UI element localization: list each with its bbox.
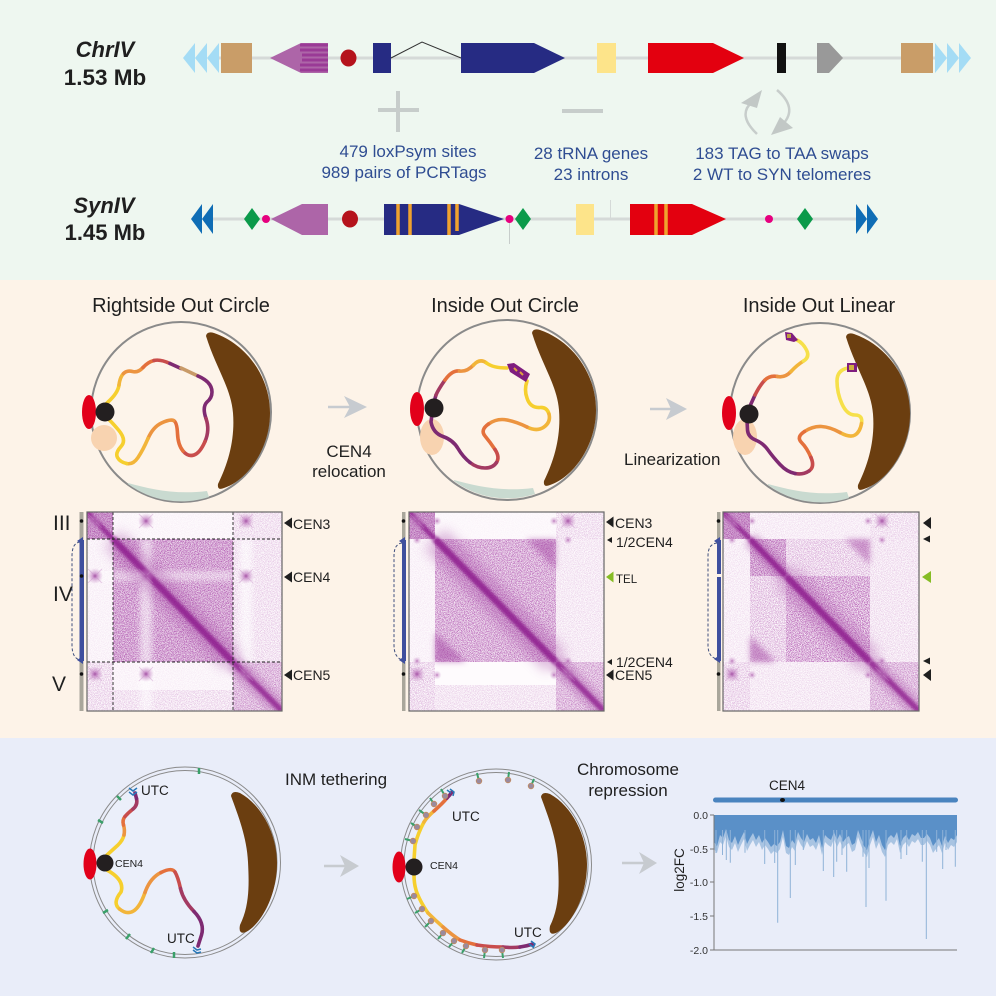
label: CEN4 relocation: relocation xyxy=(312,462,386,481)
gene track: SynIV xyxy=(191,200,878,244)
chromosome loop: inside out xyxy=(431,361,549,468)
y-axis label: log2FC xyxy=(672,848,687,892)
markers: CEN3, 1/2CEN4, TEL, CEN5: TEL xyxy=(616,574,638,586)
text: additions: 989 pairs of PCRTags xyxy=(321,163,487,182)
label: INM tethering: INM tethering xyxy=(285,770,387,789)
label: Chromosome repression: repression xyxy=(588,781,668,800)
markers: CEN3, 1/2CEN4, TEL, CEN5: 1/2CEN4 xyxy=(616,534,673,550)
icon: swap arrows xyxy=(741,90,793,135)
tick labels: -2.0 xyxy=(690,945,708,957)
label: Chromosome repression xyxy=(577,760,679,800)
markers: linear map arrowheads xyxy=(922,517,931,681)
labels: CEN4 xyxy=(115,858,143,870)
chromosome bar: inside out circle xyxy=(394,512,406,711)
gene track: ChrIV xyxy=(183,42,971,73)
text: additions xyxy=(321,142,487,182)
text: deletions xyxy=(534,144,648,184)
label: SynIV 1.45 Mb xyxy=(65,193,145,245)
panel: circularization and Hi-C (middle) xyxy=(0,280,996,738)
chromosome bar: inside out linear xyxy=(708,512,721,711)
panel: chromosome design (top) xyxy=(0,0,996,280)
telomere markers xyxy=(785,332,857,372)
markers: CEN3, 1/2CEN4, TEL, CEN5: CEN3 xyxy=(615,515,653,531)
icon: minus xyxy=(562,109,603,113)
tick labels: -1.0 xyxy=(690,877,708,889)
chromosome labels III IV V xyxy=(52,512,73,696)
markers: CEN3 CEN4 CEN5: CEN4 xyxy=(293,569,331,585)
INM anchors xyxy=(405,772,534,958)
text: swaps: 183 TAG to TAA swaps xyxy=(695,144,869,163)
label: SynIV 1.45 Mb: 1.45 Mb xyxy=(65,220,145,245)
arrow xyxy=(622,852,657,874)
nuclear pores xyxy=(98,768,199,958)
label: Linearization: Linearization xyxy=(624,450,720,469)
markers: CEN3 CEN4 CEN5 xyxy=(284,516,331,683)
nucleus: inside out linear xyxy=(722,323,910,503)
nucleus: untethered xyxy=(84,767,280,958)
arrow xyxy=(650,398,687,420)
text: swaps xyxy=(693,144,871,184)
heading: Rightside Out Circle: Rightside Out Circle xyxy=(92,295,270,317)
chromosome: tethered xyxy=(414,792,533,948)
panel: INM tethering (bottom) xyxy=(0,738,996,996)
labels: UTC xyxy=(167,931,195,946)
chromosome: inside out linear xyxy=(747,340,862,474)
label: Chromosome repression: Chromosome xyxy=(577,760,679,779)
Hi-C map: inside out linear xyxy=(723,512,919,711)
tick labels: -1.5 xyxy=(690,911,708,923)
bars xyxy=(714,815,957,939)
labels xyxy=(430,809,542,940)
axes xyxy=(710,815,957,950)
nucleus: tethered xyxy=(392,769,592,960)
text: deletions: 28 tRNA genes xyxy=(534,144,648,163)
label: CEN4 relocation xyxy=(312,442,386,481)
nucleus: inside out circle xyxy=(410,320,597,500)
Hi-C map: rightside out circle xyxy=(87,512,282,711)
text: additions: 479 loxPsym sites xyxy=(340,142,476,161)
chromosome labels III IV V: IV xyxy=(53,583,73,606)
tick labels: 0.0 xyxy=(693,810,708,822)
chromosome ideogram with CEN4: CEN4 xyxy=(769,778,805,793)
arrow xyxy=(328,396,367,418)
Hi-C map: inside out circle xyxy=(409,512,604,711)
chromosome labels III IV V: III xyxy=(53,512,71,535)
labels: UTC xyxy=(141,783,169,798)
icon: plus xyxy=(378,91,419,132)
heading: Inside Out Circle: Inside Out Circle xyxy=(431,295,579,317)
label: ChrIV 1.53 Mb: ChrIV xyxy=(76,37,137,62)
markers: CEN3, 1/2CEN4, TEL, CEN5: 1/2CEN4 xyxy=(616,654,673,670)
tick labels: -0.5 xyxy=(690,844,708,856)
heading: Inside Out Linear: Inside Out Linear xyxy=(743,295,895,317)
label: CEN4 relocation: CEN4 xyxy=(326,442,372,461)
labels: UTC xyxy=(452,809,480,824)
labels: CEN4 xyxy=(430,860,458,872)
nucleus: rightside out circle xyxy=(82,322,271,502)
chromosome: untethered xyxy=(107,793,202,946)
label: SynIV 1.45 Mb: SynIV xyxy=(73,193,137,218)
labels xyxy=(115,783,195,946)
tick labels xyxy=(690,810,708,957)
markers: CEN3, 1/2CEN4, TEL, CEN5: CEN5 xyxy=(615,667,653,683)
chromosome labels III IV V: V xyxy=(52,673,66,696)
label: ChrIV 1.53 Mb xyxy=(64,37,146,90)
arrow xyxy=(324,855,359,877)
markers: CEN3 CEN4 CEN5: CEN3 xyxy=(293,516,331,532)
label: ChrIV 1.53 Mb: 1.53 Mb xyxy=(64,65,146,90)
text: deletions: 23 introns xyxy=(554,165,628,184)
labels: UTC xyxy=(514,925,542,940)
telomere ends xyxy=(129,788,201,953)
telomere ends xyxy=(447,789,535,948)
markers: CEN3 CEN4 CEN5: CEN5 xyxy=(293,667,331,683)
text: swaps: 2 WT to SYN telomeres xyxy=(693,165,871,184)
markers: CEN3, 1/2CEN4, TEL, CEN5 xyxy=(606,515,673,683)
chart: log2FC along chromosome IV xyxy=(672,778,958,957)
inverted segment marker xyxy=(507,363,530,382)
chromosome bar: rightside out xyxy=(72,512,84,711)
chromosome loop: rightside out xyxy=(105,360,212,464)
chromosome ideogram with CEN4 xyxy=(713,778,958,802)
